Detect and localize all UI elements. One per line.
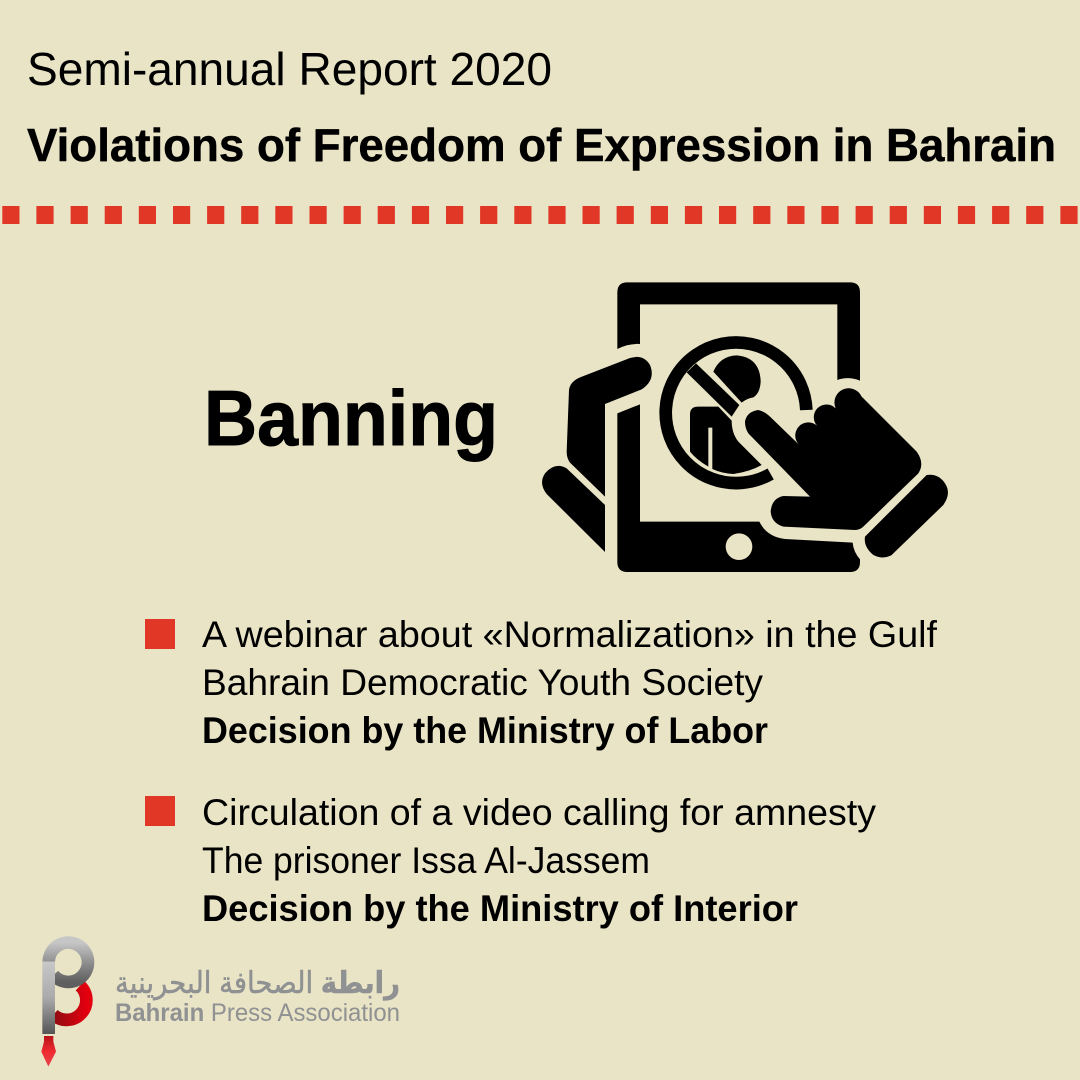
- list item 2: [145, 792, 877, 929]
- item 2 line 2: The prisoner Issa Al-Jassem: [202, 840, 650, 881]
- bullet 2: [145, 796, 175, 826]
- main title: Violations of Freedom of Expression in Bahrain: [27, 119, 1056, 171]
- header subtitle: Semi-annual Report 2020: [27, 43, 552, 95]
- logo: Bahrain Press Association: [41, 943, 400, 1067]
- item 1 line 3: Decision by the Ministry of Labor: [202, 710, 768, 751]
- list item 1: [145, 614, 938, 751]
- logo Arabic name: رابطة الصحافة البحرينية: [115, 967, 400, 1000]
- bullet 1: [145, 619, 175, 649]
- heading: Banning: Banning: [204, 374, 498, 462]
- logo English name: Bahrain Press Association: [115, 999, 400, 1027]
- item 1 line 2: Bahrain Democratic Youth Society: [202, 662, 763, 703]
- item 2 line 3: Decision by the Ministry of Interior: [202, 888, 798, 929]
- dotted red divider: [2, 206, 1078, 224]
- item 2 line 1: Circulation of a video calling for amnesty: [202, 792, 877, 833]
- logo mark: pen letter B: [41, 943, 88, 1067]
- item 1 line 1: A webinar about «Normalization» in the Gulf: [202, 614, 938, 655]
- icon: hands holding tablet with banned person: [542, 282, 948, 572]
